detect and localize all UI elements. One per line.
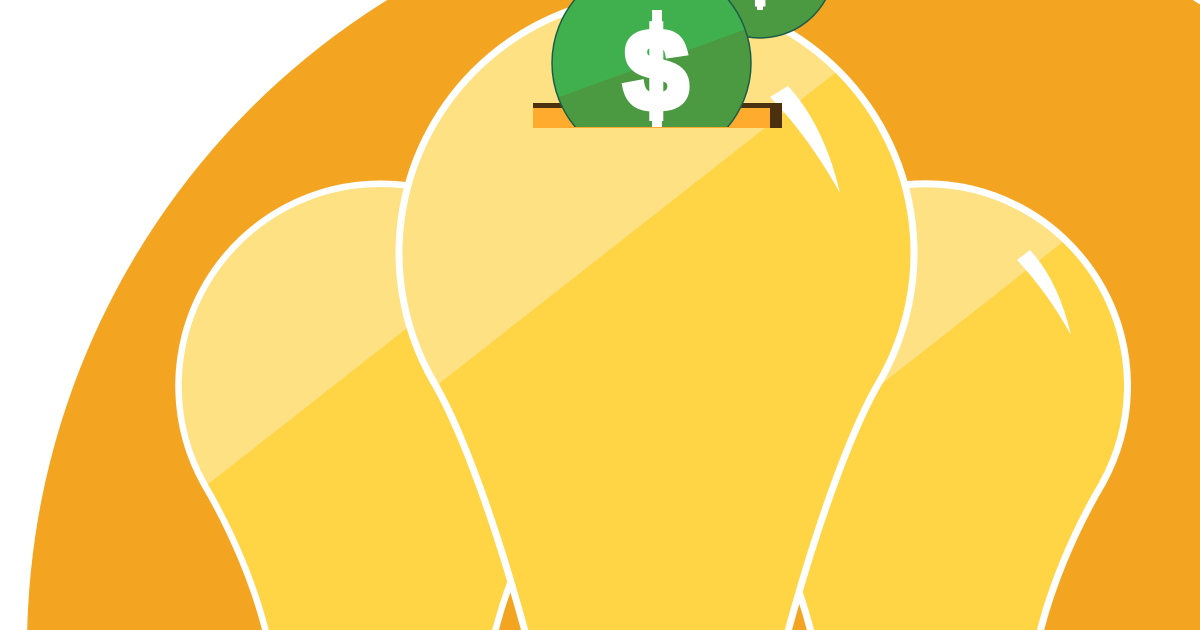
dollar sign front: $ (625, 8, 687, 133)
highlight streak center (770, 86, 840, 193)
center bulb (396, 8, 918, 630)
right bulb (799, 180, 1131, 630)
front coin (551, 0, 752, 127)
coin slot (533, 103, 782, 128)
dollar sign back (754, 0, 766, 10)
back coin (730, 0, 826, 39)
left bulb (175, 180, 510, 630)
highlight streak right (1017, 250, 1071, 335)
